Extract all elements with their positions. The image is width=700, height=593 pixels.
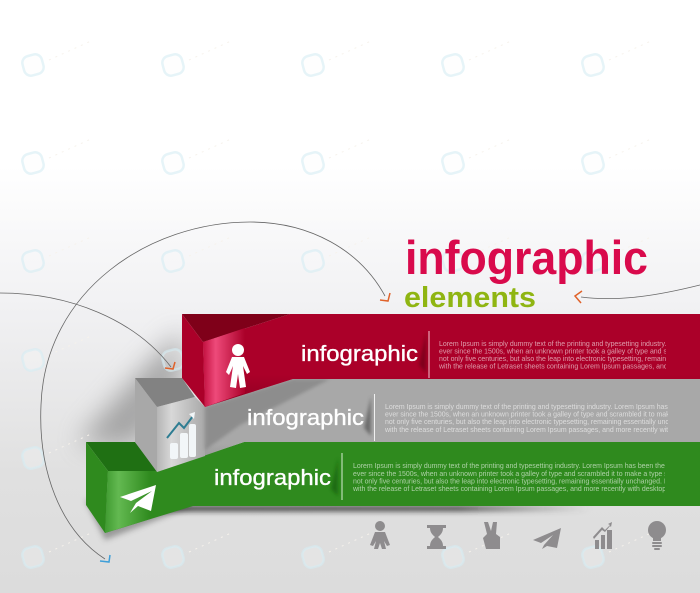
icon: paper plane small bbox=[533, 528, 561, 549]
icon: hourglass bbox=[427, 525, 446, 549]
text block: with the release of Letraset sheets containing Lorem Ipsum passages, and more recently with desktop publishing bbox=[352, 486, 699, 493]
panel: gray band bbox=[135, 378, 700, 472]
arrow: top arc into red band bbox=[41, 222, 390, 562]
heading: infographic bbox=[301, 341, 418, 366]
arrow: right curve to title bbox=[575, 285, 700, 303]
text block: ever since the 1500s, when an unknown printer took a galley of type and scrambled it to make a type specimen bbox=[353, 471, 694, 478]
background shadows bbox=[80, 330, 590, 540]
arrow: left curve into gray block bbox=[0, 293, 175, 369]
text block: with the release of Letraset sheets containing Lorem Ipsum passages, and more recently with desktop bbox=[384, 427, 698, 434]
icon: bar chart with arrow bbox=[167, 412, 196, 459]
panel: green band bbox=[86, 442, 700, 533]
icon: victory hand bbox=[483, 522, 500, 549]
icon: person bbox=[226, 344, 250, 388]
text block: Lorem Ipsum is simply dummy text of the printing and typesetting industry. Lorem Ipsum has been the industry's bbox=[353, 463, 696, 470]
heading: infographic bbox=[247, 405, 364, 430]
title bbox=[404, 231, 648, 314]
icon: light bulb bbox=[648, 521, 666, 550]
text block: Lorem Ipsum is simply dummy text of the printing and typesetting industry. Lorem bbox=[439, 341, 688, 348]
text block: not only five centuries, but also the leap into electronic typesetting, remaining essentially unchanged. It was bbox=[353, 478, 682, 486]
panel: red band bbox=[182, 314, 700, 407]
icon: paper plane bbox=[120, 485, 156, 513]
text block: Lorem Ipsum is simply dummy text of the printing and typesetting industry. Lorem Ipsum has been bbox=[385, 404, 685, 411]
text block bbox=[384, 404, 698, 434]
text block bbox=[439, 340, 666, 370]
icon row bbox=[370, 521, 666, 550]
subtitle: elements bbox=[404, 282, 536, 314]
text block: not only five centuries, but also the leap into electronic typesetting, remaining essentially unchanged bbox=[385, 419, 692, 426]
text block: ever since the 1500s, when an unknown printer took a galley of type and scrambled it to make a type bbox=[385, 412, 694, 418]
text block: ever since the 1500s, when an unknown printer took a galley of type and scrambled bbox=[439, 348, 696, 356]
title: infographic bbox=[405, 231, 648, 284]
text block bbox=[353, 462, 665, 492]
icon: bar chart small bbox=[593, 522, 612, 549]
heading: infographic bbox=[214, 465, 331, 490]
icon: person small bbox=[370, 521, 390, 549]
